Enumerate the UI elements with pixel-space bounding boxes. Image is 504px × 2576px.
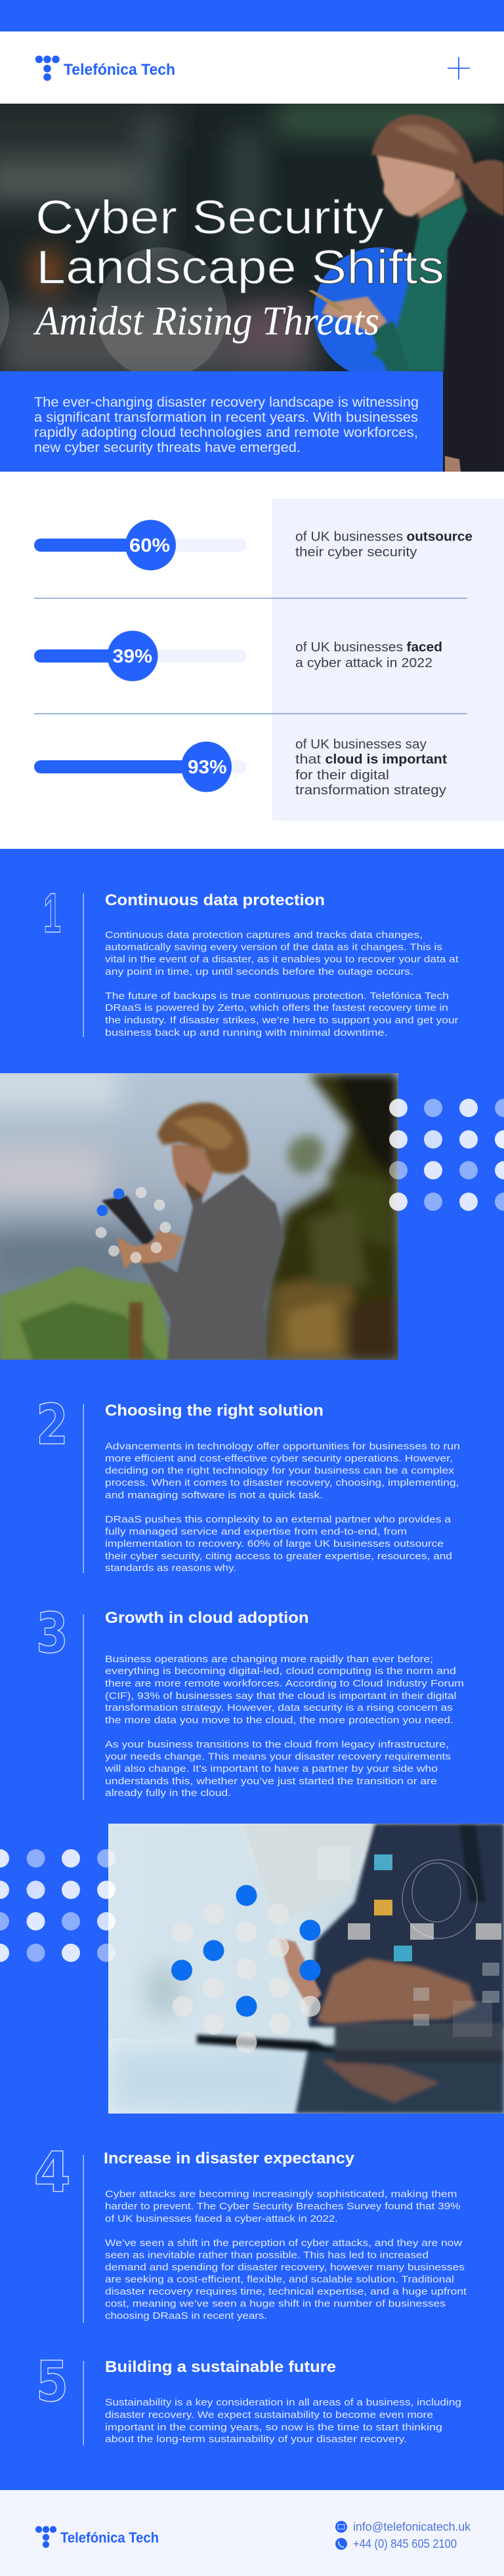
section 3: growth in cloud adoption: the more data you move to the cloud, the more protection you need. xyxy=(105,1715,453,1726)
header logo: Telefónica Tech xyxy=(35,56,175,81)
title: Landscape Shifts xyxy=(36,241,444,294)
section 3: growth in cloud adoption: Business operations are changing more rapidly than ever before; xyxy=(105,1654,433,1665)
stat: 93%: 93% xyxy=(188,757,227,778)
section 4: increase in disaster expectancy: are seeking a cost-efficient, flexible, and scalable solution. Traditional xyxy=(105,2274,454,2285)
stat: 93%: for their digital xyxy=(295,768,389,783)
laptop lid edge xyxy=(108,1824,310,2039)
background right of lid xyxy=(242,1824,504,2027)
section 1: continuous data protection xyxy=(43,882,459,1038)
stat: 39%: faced xyxy=(407,640,442,655)
man xyxy=(102,1145,285,1360)
title xyxy=(35,192,444,294)
section 2: choosing the right solution: implementation to recovery. 60% of large UK businesses outsource xyxy=(105,1538,444,1549)
stat: 93%: transformation strategy xyxy=(295,783,446,798)
intro box: a significant transformation in recent years. With businesses xyxy=(34,410,418,425)
section 5: building a sustainable future: Building a sustainable future xyxy=(105,2358,336,2376)
section 4: increase in disaster expectancy: harder to prevent. The Cyber Security Breaches Survey found that 39% xyxy=(105,2201,461,2212)
photo: man with tablet xyxy=(0,1063,398,1360)
dots pattern right xyxy=(389,1099,504,1211)
section 4: increase in disaster expectancy: of UK businesses faced a cyber-attack in 2022. xyxy=(105,2213,338,2224)
dots overlay xyxy=(171,1885,320,2053)
hair xyxy=(158,1103,249,1174)
table and reflection xyxy=(197,2024,504,2114)
stat: 93%: cloud is important xyxy=(326,752,447,767)
section 2: choosing the right solution: more efficient and cost-effective cyber security operations. However, xyxy=(105,1453,453,1464)
numeral 5: 5 xyxy=(36,2350,68,2415)
interface squares xyxy=(374,1854,392,1870)
plants left xyxy=(0,1266,174,1360)
foliage right xyxy=(262,1073,398,1360)
hand and phone xyxy=(322,296,387,335)
section 3: growth in cloud adoption: transformation strategy. However, data security is a rising concern as xyxy=(105,1702,453,1713)
section 1: continuous data protection: DRaaS is powered by Zerto, which offers the fastest recovery time in xyxy=(105,1002,448,1013)
stat: 93%: that xyxy=(295,752,322,767)
numeral 3: 3 xyxy=(36,1601,68,1666)
stat: 39%: 39% xyxy=(113,646,152,667)
section 3: growth in cloud adoption: Growth in cloud adoption xyxy=(105,1609,309,1627)
stat: 39%: a cyber attack in 2022 xyxy=(295,656,432,670)
section 4: increase in disaster expectancy: disaster recovery requires time, technical expertise, and a huge upfront xyxy=(105,2286,467,2297)
stat: 60%: 60% xyxy=(129,535,170,556)
section 3: growth in cloud adoption: (CIF), 93% of businesses say that the cloud is important in their digital xyxy=(105,1690,457,1702)
interface rings xyxy=(402,1860,477,1938)
stat: 60%: their cyber security xyxy=(295,545,417,560)
section 3: growth in cloud adoption: As your business transitions to the cloud from legacy infrastructure, xyxy=(105,1739,449,1750)
section 1: continuous data protection: any point in time, up until seconds before the outage occurs. xyxy=(105,966,413,977)
section 3: growth in cloud adoption: understands this, whether you’ve just started the transition or are xyxy=(105,1776,437,1787)
section 5: building a sustainable future: about the long-term sustainability of your disaster recovery. xyxy=(105,2434,407,2445)
footer panel xyxy=(0,2490,504,2576)
section 4: increase in disaster expectancy: choosing DRaaS in recent years. xyxy=(105,2310,267,2321)
interface folders xyxy=(348,1923,501,1940)
hero circle: blue xyxy=(314,247,445,378)
section 1: continuous data protection: vital in the event of a disaster, as it enables you to recover your data at xyxy=(105,954,459,965)
section 4: increase in disaster expectancy: cost, meaning we’ve seen a huge shift in the number of businesses xyxy=(105,2299,446,2310)
numeral 1: 1 xyxy=(43,882,61,945)
dots pattern left xyxy=(0,1849,116,1962)
stat: 93% xyxy=(34,737,447,798)
shirt xyxy=(371,197,467,371)
section 2: choosing the right solution: Choosing the right solution xyxy=(105,1402,324,1420)
intro box: new cyber security threats have emerged. xyxy=(34,440,301,455)
stat: 93%: of UK businesses say xyxy=(295,737,427,752)
header logo: Telefónica Tech: Telefónica Tech xyxy=(64,61,175,79)
contact: phone: +44 (0) 845 605 2100 xyxy=(353,2537,457,2550)
blue content panel xyxy=(0,849,504,2490)
top blue band xyxy=(0,0,504,31)
section 2: choosing the right solution: and managing software is not a quick task. xyxy=(105,1490,323,1501)
section 5: building a sustainable future xyxy=(36,2350,461,2445)
panel: stats background xyxy=(272,499,504,821)
section 2: choosing the right solution xyxy=(36,1393,460,1574)
subtitle: Amidst Rising Threats xyxy=(33,299,379,344)
section 5: building a sustainable future: Sustainability is a key consideration in all areas of a business, including xyxy=(105,2397,461,2408)
section 3: growth in cloud adoption: everything is becoming digital-led, cloud computing is the norm and xyxy=(105,1666,456,1677)
contact: email: info@telefonicatech.uk xyxy=(353,2520,471,2533)
hero photo: woman looking at phone xyxy=(0,104,504,472)
section 1: continuous data protection: automatically saving every version of the data as it changes. This is xyxy=(105,942,442,952)
footer logo: Telefónica Tech xyxy=(35,2526,159,2548)
stat: 60%: outsource xyxy=(407,530,472,544)
small dots on photo xyxy=(96,1187,171,1263)
numeral 4: 4 xyxy=(34,2140,71,2205)
neck xyxy=(410,177,463,220)
section 4: increase in disaster expectancy: Increase in disaster expectancy xyxy=(104,2150,355,2167)
section 3: growth in cloud adoption xyxy=(36,1601,464,1800)
section 3: growth in cloud adoption: there are more remote workforces. According to Cloud Industry Forum xyxy=(105,1678,464,1689)
section 2: choosing the right solution: DRaaS pushes this complexity to an external partner who provides a xyxy=(105,1514,452,1525)
stat: 39%: of UK businesses xyxy=(295,640,403,655)
hero circle: grey xyxy=(96,247,227,378)
section 5: building a sustainable future: important in the coming years, so now is the time to start thinking xyxy=(105,2422,442,2433)
section 2: choosing the right solution: Advancements in technology offer opportunities for businesses to run xyxy=(105,1441,460,1452)
section 2: choosing the right solution: standards as reasons why. xyxy=(105,1563,236,1574)
section 3: growth in cloud adoption: your needs change. This means your disaster recovery requirements xyxy=(105,1751,451,1763)
intro box xyxy=(0,371,443,472)
numeral 2: 2 xyxy=(36,1393,68,1458)
section 3: growth in cloud adoption: already fully in the cloud. xyxy=(105,1788,231,1799)
section 4: increase in disaster expectancy: demand and spending for disaster recovery, however many businesses xyxy=(105,2262,465,2273)
section 2: choosing the right solution: fully managed service and expertise from end-to-end, from xyxy=(105,1526,407,1538)
footer logo: Telefónica Tech: Telefónica Tech xyxy=(60,2529,159,2546)
section 1: continuous data protection: business back up and running with minimal downtime. xyxy=(105,1027,387,1038)
stat: 39% xyxy=(34,631,442,681)
section 1: continuous data protection: Continuous data protection xyxy=(105,891,325,909)
section 4: increase in disaster expectancy xyxy=(34,2140,467,2323)
stat: 60%: of UK businesses xyxy=(295,530,403,544)
section 4: increase in disaster expectancy: We’ve seen a shift in the perception of cyber attacks, and they are now xyxy=(105,2238,462,2249)
section 4: increase in disaster expectancy: Cyber attacks are becoming increasingly sophisticated, making them xyxy=(105,2188,457,2200)
photo: hands on laptop xyxy=(108,1824,504,2114)
intro box: The ever-changing disaster recovery landscape is witnessing xyxy=(34,395,419,410)
hand xyxy=(317,1958,476,2024)
face xyxy=(376,152,455,216)
intro box: rapidly adopting cloud technologies and remote workforces, xyxy=(34,425,418,440)
section 1: continuous data protection: the industry. If disaster strikes, we’re here to support you and get your xyxy=(105,1015,459,1026)
section 4: increase in disaster expectancy: seen as inevitable rather than possible. This has led to increased xyxy=(105,2250,429,2260)
section 2: choosing the right solution: deciding on the right technology for your business can be a complex xyxy=(105,1465,455,1477)
stat: 60% xyxy=(34,520,472,571)
blazer xyxy=(445,212,502,368)
title: Cyber Security xyxy=(35,192,384,244)
section 3: growth in cloud adoption: will also change. It’s important to have a partner by your side who xyxy=(104,1763,438,1774)
section 1: continuous data protection: The future of backups is true continuous protection. Telefónica Tech xyxy=(105,991,449,1002)
hero circle: grey left xyxy=(0,279,9,346)
section 5: building a sustainable future: disaster recovery. We expect sustainability to become even more xyxy=(105,2409,433,2421)
section 2: choosing the right solution: process. When it comes to disaster recovery, choosing, implementing, xyxy=(105,1477,459,1488)
icon: plus xyxy=(448,57,470,79)
section 1: continuous data protection: Continuous data protection captures and tracks data changes, xyxy=(105,930,423,941)
hair xyxy=(371,115,504,216)
section 2: choosing the right solution: their cyber security, citing access to greater expertise, resources, and xyxy=(105,1551,452,1562)
